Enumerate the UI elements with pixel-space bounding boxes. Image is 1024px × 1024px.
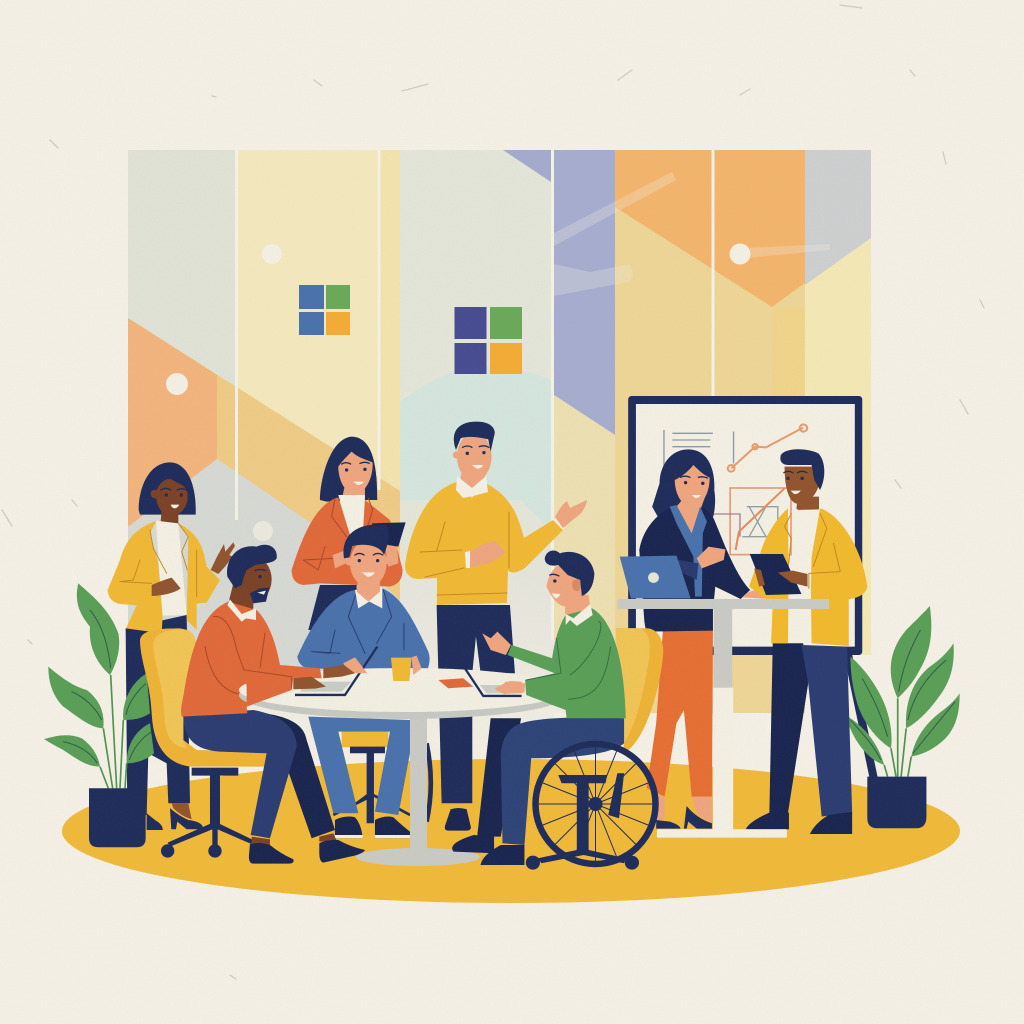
hands <box>152 542 235 596</box>
raised hand and cuff <box>553 500 587 530</box>
blouse <box>338 495 365 535</box>
shape: mint <box>400 367 551 530</box>
pot <box>867 777 926 828</box>
person: woman in yellow jacket <box>108 462 235 830</box>
jacket seams <box>303 498 373 570</box>
laptop <box>620 556 691 598</box>
neck <box>565 595 590 620</box>
column: pale centre <box>400 150 551 570</box>
jacket seams <box>312 590 404 653</box>
heels <box>147 808 203 830</box>
person: seated man in blue <box>297 524 431 838</box>
person: woman in orange jacket <box>292 437 406 633</box>
hair <box>343 524 388 558</box>
hair <box>780 449 824 490</box>
collar <box>456 476 488 498</box>
orange sleeve over table <box>244 665 322 707</box>
leaves <box>845 606 960 765</box>
neck and face <box>785 467 822 518</box>
laptop: left <box>295 647 377 695</box>
roof: grey shape <box>128 459 400 700</box>
neck and face <box>675 465 710 533</box>
jacket seams <box>785 513 840 588</box>
white top <box>156 521 187 616</box>
tablet <box>372 522 406 547</box>
board box chart <box>714 488 791 555</box>
shoe <box>445 808 471 831</box>
hands <box>754 568 808 587</box>
upper pole <box>714 608 732 688</box>
trousers <box>183 710 335 838</box>
pedestal <box>410 712 427 854</box>
collar <box>355 587 382 608</box>
triangle: periwinkle top <box>503 150 551 182</box>
casters <box>526 856 639 870</box>
blouse <box>670 505 707 597</box>
background panel: abstract office wall <box>128 150 871 762</box>
legs <box>437 422 515 831</box>
leaf veins <box>63 610 152 763</box>
hair <box>227 545 277 588</box>
column: yellow strip <box>380 150 400 530</box>
band: yellow under periwinkle <box>554 395 615 640</box>
sweater <box>508 608 626 718</box>
jacket <box>108 521 220 633</box>
hair <box>545 551 594 596</box>
face details <box>784 471 807 494</box>
person: woman in navy jacket <box>620 449 769 829</box>
ankles and heels <box>656 795 712 829</box>
sweater <box>181 602 293 717</box>
hair <box>139 462 196 515</box>
jacket <box>639 507 750 632</box>
neck and face <box>338 452 373 507</box>
band: orange upper right <box>615 150 805 307</box>
trousers <box>769 643 852 817</box>
lower pole and base <box>657 688 787 838</box>
leaf veins <box>850 630 955 760</box>
wheelchair frame <box>538 773 626 863</box>
jacket <box>292 497 403 587</box>
hub <box>588 797 602 811</box>
hair <box>652 449 715 522</box>
hands <box>697 547 769 599</box>
hands <box>333 545 398 568</box>
column: grey left <box>128 150 236 390</box>
back leg <box>477 718 521 837</box>
spokes <box>536 744 656 864</box>
hands: orange man <box>293 665 355 689</box>
column: yellow right <box>805 238 871 655</box>
column: periwinkle <box>554 150 615 435</box>
stems <box>884 698 911 777</box>
wheelchair wheel <box>536 744 656 864</box>
table top <box>617 599 829 609</box>
face details <box>342 462 369 485</box>
person: seated man in orange <box>140 545 365 864</box>
torso <box>297 588 430 672</box>
collar <box>566 604 593 626</box>
lights: round dots <box>166 244 750 541</box>
near leg <box>501 717 624 845</box>
ankle <box>172 803 192 819</box>
hair <box>320 437 377 502</box>
chest hand and cuff <box>465 541 506 568</box>
face details <box>463 446 489 469</box>
pot <box>89 788 146 847</box>
hands <box>482 632 525 694</box>
band: orange left <box>128 318 217 527</box>
pedestal base <box>356 848 480 866</box>
top surface <box>239 668 567 712</box>
collar <box>227 599 256 622</box>
legs <box>308 717 410 815</box>
wall base <box>128 150 871 762</box>
whiteboard <box>628 396 862 655</box>
laptop: right <box>448 643 522 696</box>
column: grey upper right <box>805 150 871 285</box>
floor: yellow ellipse <box>62 759 960 903</box>
jacket <box>749 508 867 646</box>
orange trousers <box>647 630 713 797</box>
stems <box>100 675 127 788</box>
sweater seams <box>526 622 611 699</box>
chair behind <box>333 732 431 823</box>
board text lines <box>664 430 734 470</box>
jacket seams <box>120 523 197 597</box>
sleeve seam <box>244 670 292 688</box>
notebook <box>438 678 473 688</box>
person: man in yellow jacket <box>746 449 867 834</box>
neck and face <box>345 540 391 602</box>
plant: left <box>44 583 154 847</box>
person: man in yellow sweater <box>405 422 587 831</box>
group: right side scene (board, plant) <box>628 396 960 828</box>
cup <box>391 658 412 681</box>
face details <box>355 553 383 577</box>
face details <box>681 476 708 498</box>
skirt <box>308 585 357 633</box>
beard <box>250 588 269 603</box>
sweater <box>405 482 563 605</box>
shoes <box>249 840 365 864</box>
sleeve cuff <box>678 560 698 580</box>
face details <box>550 574 560 598</box>
easel leg <box>847 650 874 780</box>
face details <box>255 569 266 595</box>
neck and face <box>151 479 188 528</box>
logo: small window <box>299 285 350 335</box>
band: warm strip <box>772 307 805 607</box>
band: peach lower left <box>128 318 400 600</box>
light streaks <box>554 172 830 296</box>
hair <box>454 422 495 452</box>
leaves <box>44 583 154 767</box>
chair base <box>168 768 253 847</box>
tee <box>789 509 820 620</box>
column: pale yellow <box>237 150 380 510</box>
top edge <box>239 671 567 719</box>
person: man in wheelchair <box>452 551 663 870</box>
tablet <box>750 554 801 595</box>
sweater seams <box>205 617 265 695</box>
window dividers <box>236 150 713 640</box>
office chair <box>140 628 268 858</box>
legs <box>126 615 190 815</box>
ear <box>572 579 582 591</box>
chair back <box>616 628 663 753</box>
face details <box>161 488 187 508</box>
hand on keyboard <box>495 681 522 693</box>
head <box>546 565 584 607</box>
sweater seams <box>420 512 509 595</box>
logo: large window <box>454 307 522 374</box>
ankles <box>252 833 337 845</box>
shoes <box>452 835 524 865</box>
neck and face <box>453 433 492 493</box>
board line chart <box>728 424 807 472</box>
plant: right <box>845 606 960 828</box>
face <box>235 557 272 602</box>
rim <box>536 744 656 864</box>
neck <box>228 583 253 615</box>
column: amber lower <box>615 150 805 713</box>
shoes <box>335 817 410 838</box>
hands: blue man <box>343 656 422 675</box>
standing table <box>617 599 829 838</box>
meeting table <box>239 668 567 866</box>
shoes <box>746 812 852 834</box>
table items and forearms <box>244 643 522 707</box>
